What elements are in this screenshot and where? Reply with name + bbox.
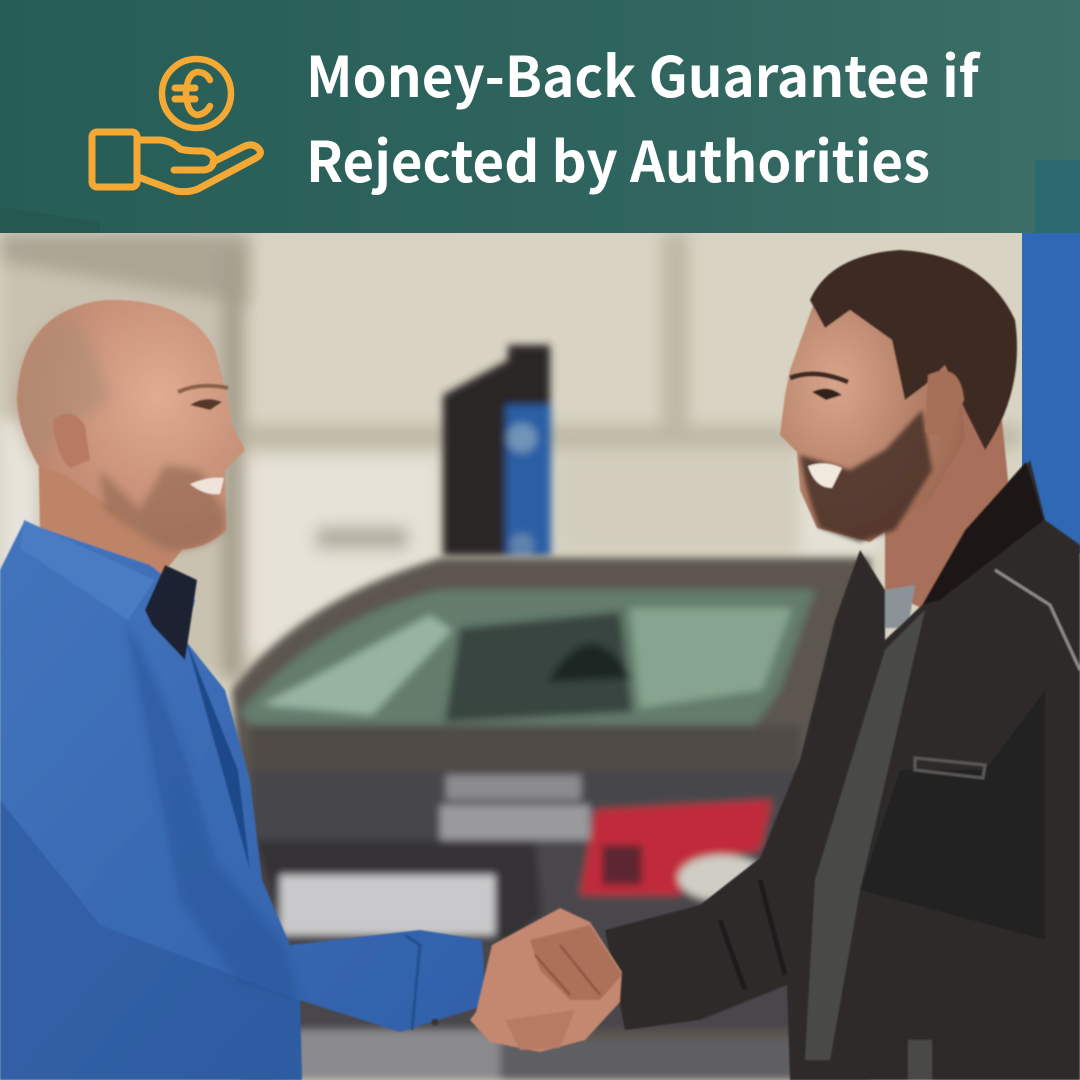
shirt placket [186, 640, 250, 870]
hair [810, 250, 1017, 450]
jacket [605, 460, 1080, 1080]
head [17, 300, 245, 550]
neck [885, 390, 1010, 610]
sleeve stripe [995, 570, 1080, 670]
right man in black jacket [605, 250, 1080, 1080]
ear [925, 371, 964, 440]
coin [162, 59, 231, 128]
eye [190, 399, 222, 410]
left man in blue shirt [0, 300, 486, 1080]
eyebrow [790, 374, 848, 382]
blue pillar [1022, 233, 1080, 553]
ear [53, 414, 90, 468]
under-arm shade [0, 800, 302, 1080]
shaved hair shadow [17, 315, 110, 460]
dark column with blue cylinder [443, 345, 551, 557]
title: Rejected by Authorities [306, 118, 930, 199]
sleeve folds [720, 880, 785, 990]
collar [20, 520, 155, 620]
pocket flap [915, 758, 985, 778]
arm shade [125, 620, 300, 1000]
garage background photo [0, 233, 1080, 1080]
eye [812, 389, 842, 400]
handshake [470, 908, 622, 1052]
cuff line [405, 935, 420, 1030]
title [306, 33, 981, 199]
cuff button [432, 1018, 438, 1026]
blurred car [232, 558, 870, 1080]
smile [808, 463, 842, 488]
smile [190, 478, 224, 494]
pocket [860, 690, 1045, 940]
stubble [100, 465, 224, 550]
title: Money-Back Guarantee if [306, 33, 981, 114]
header banner [0, 0, 1080, 233]
grey tee [884, 585, 915, 628]
hand [92, 132, 260, 192]
eyebrow [178, 386, 228, 392]
head [780, 300, 965, 542]
torso and arm [0, 522, 486, 1080]
jacket strap [908, 1040, 932, 1080]
collar [922, 462, 1044, 605]
neck [38, 430, 190, 590]
beard [800, 410, 932, 542]
icon: euro coin in hand [92, 59, 260, 192]
jacket centre panel [805, 610, 925, 1060]
dark undershirt [145, 565, 197, 660]
